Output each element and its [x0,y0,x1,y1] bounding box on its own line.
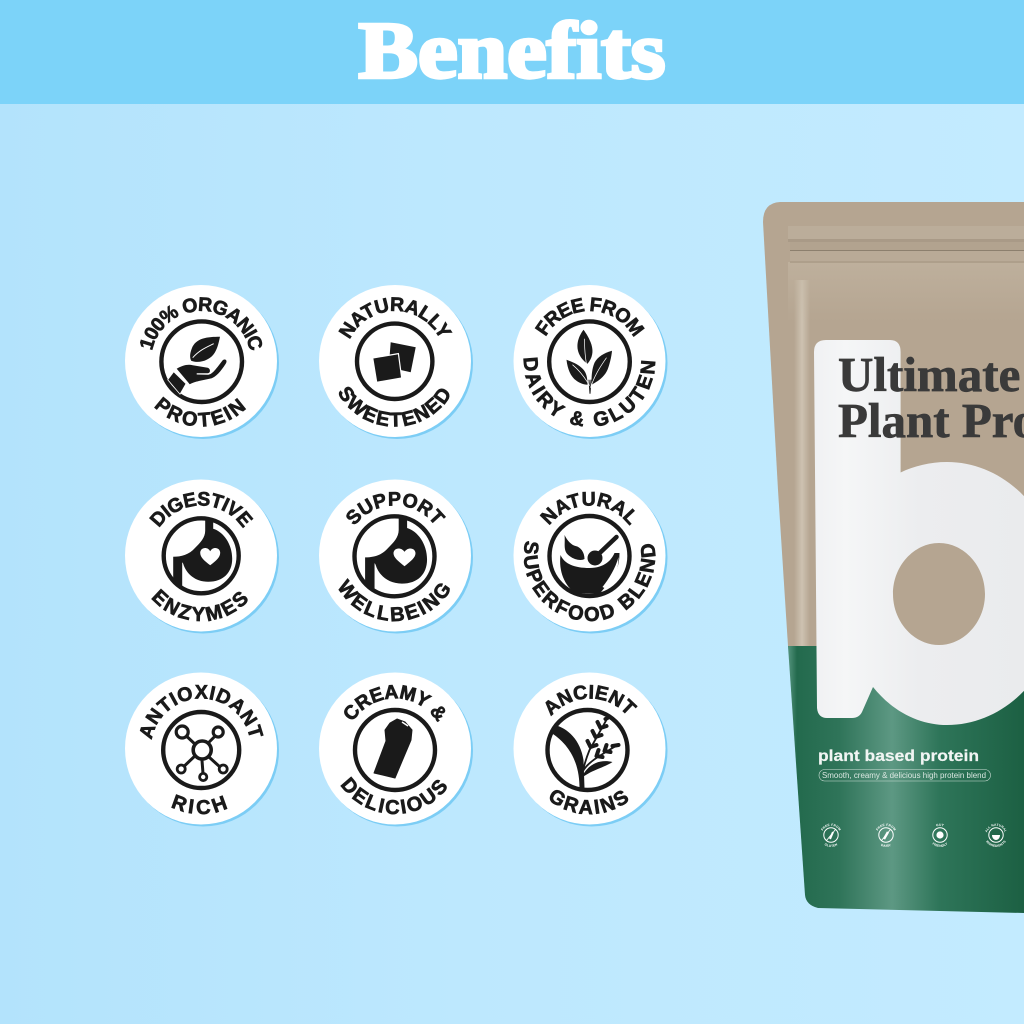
icon: plant leaves [549,321,630,402]
small icon: free from dairy [876,824,896,847]
badge disc [125,672,277,824]
badge bottom text: ENZYMES [151,588,248,622]
badge disc [319,480,471,632]
badge bottom text: DAIRY & GLUTEN [523,357,656,427]
pouch subtitle: plant based protein [818,748,979,765]
small icon: free from gluten [821,824,841,847]
badge: natural superfood blend [514,480,668,634]
badge bottom text: RICH [171,794,228,814]
icon: mortar, pestle and leaf [550,516,630,596]
badge bottom text: DELICIOUS [340,776,447,814]
badge bottom text: PROTEIN [154,396,246,427]
white b logo [814,340,1024,725]
badge: creamy and delicious [319,672,473,826]
badge shadow [321,482,473,634]
badge bottom text: GRAINS [550,790,628,815]
badge: digestive enzymes [125,480,279,634]
badge disc [125,285,277,437]
badge shadow [516,674,668,826]
title: Benefits [358,8,666,96]
badge shadow [516,482,668,634]
badge top text: CREAMY & [344,684,446,722]
badge shadow [516,287,668,439]
small icon: all natural ingredients: ALL NATURAL [985,824,1006,832]
pouch tan upper [760,200,1024,646]
pouch green lower [788,646,1024,913]
badge top text: NATURAL [540,492,635,526]
badge bottom text: SWEETENED [338,386,450,427]
badge: support wellbeing [319,480,473,634]
small icon: gut friendly [932,824,948,847]
badge disc [514,285,666,437]
pouch title [838,356,1024,438]
small icon: gut friendly: FRIENDLY [932,842,947,847]
badge disc [319,285,471,437]
product pouch [763,202,1024,913]
icon: sugar cubes [357,324,432,399]
badge disc [125,480,277,632]
badge disc [319,672,471,824]
header band [0,0,1024,104]
badge shadow [127,482,279,634]
small icon: free from gluten: GLUTEN [824,843,838,847]
icon: molecule [163,712,239,788]
badge top text: NATURALLY [338,297,452,339]
icon: grain stalk [548,710,628,790]
small icon: free from gluten: FREE FROM [821,824,841,831]
icon: stomach with heart [354,516,434,596]
badge shadow [127,287,279,439]
small icon: free from dairy: DAIRY [881,844,890,847]
badge top text: ANTIOXIDANT [140,684,264,740]
badge: antioxidant rich [125,672,279,826]
badge: free from dairy and gluten [514,285,668,439]
icon: stomach with heart [164,518,239,593]
badge shadow [321,674,473,826]
badge top text: ANCIENT [545,684,638,716]
badge top text: FREE FROM [534,297,645,337]
badge top text: SUPPORT [346,492,446,524]
pouch title: Ultimate [838,347,1020,402]
badge top text: DIGESTIVE [149,492,254,528]
badge disc [514,672,666,824]
badge: ancient grains [514,672,668,826]
icon: protein shaker [355,710,435,790]
small icon: all natural ingredients: INGREDIENTS [986,840,1006,847]
pouch tagline pill: Smooth, creamy & delicious high protein blend [822,771,986,780]
badge shadow [127,674,279,826]
pouch seal lines [788,226,1024,263]
badge shadow [321,287,473,439]
badge bottom text: WELLBEING [338,578,450,622]
icon: hand holding leaf [161,321,242,402]
small icon: free from dairy: FREE FROM [876,824,896,831]
badge: 100% organic protein [125,285,279,439]
badge bottom text: SUPERFOOD BLEND [524,541,656,622]
pouch highlights [788,262,1024,646]
small icon: gut friendly: GUT [936,824,944,826]
small icon: all natural ingredients [985,824,1006,847]
badge disc [514,480,666,632]
badge: naturally sweetened [319,285,473,439]
badge top text: 100% ORGANIC [140,297,262,350]
